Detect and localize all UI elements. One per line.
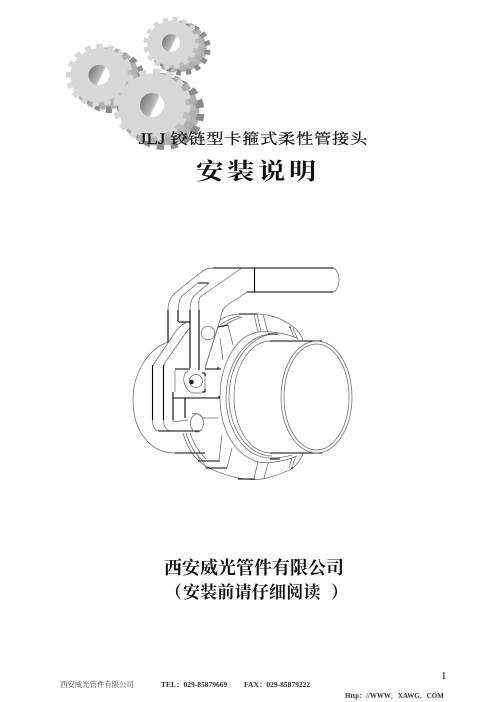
bolts xyxy=(190,326,215,432)
clamp collar xyxy=(183,314,303,480)
footer: telephone: TEL：029-85879669 xyxy=(161,680,227,689)
company name: 西安威光管件有限公司 xyxy=(164,558,344,578)
subtitle: product name: JLJ 铰链型卡箍式柔性管接头 xyxy=(139,131,368,148)
install notice: ） xyxy=(331,583,348,602)
install notice: 安装前请仔细阅读 xyxy=(183,583,321,602)
page number: 1 xyxy=(441,670,446,682)
title: installation instructions: 安装说明 xyxy=(196,159,320,184)
gear: top right xyxy=(140,10,214,83)
pipe with end opening xyxy=(233,341,352,453)
footer: website: Http：//WWW．XAWG．COM xyxy=(345,692,444,700)
gear: centre xyxy=(108,59,210,159)
gear: left xyxy=(61,35,150,122)
install notice: （ xyxy=(165,583,182,602)
rear pipe body xyxy=(133,342,205,453)
coupling rings xyxy=(218,332,297,463)
footer: fax: FAX：029-85879222 xyxy=(244,680,310,689)
footer: company: 西安威光管件有限公司 xyxy=(60,680,134,689)
handle and straps xyxy=(152,268,339,431)
central bolt and bracket xyxy=(173,369,222,422)
